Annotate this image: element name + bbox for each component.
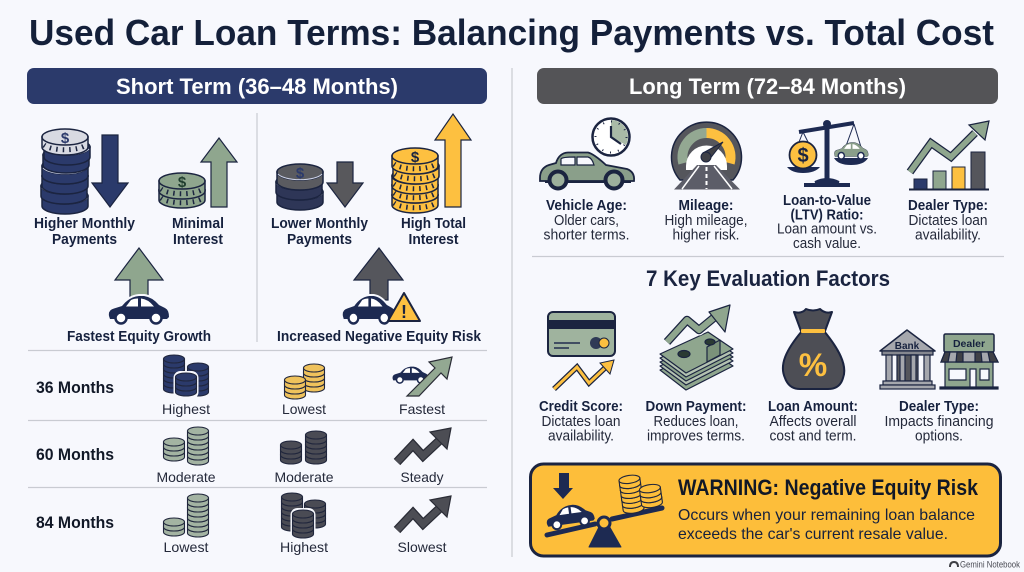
icon: money stack and arrow (660, 305, 733, 390)
label: down payment: Down Payment: (646, 399, 746, 415)
text: dealer type financing description (884, 414, 994, 444)
text: ltv description: cash value. (793, 236, 861, 252)
title: Used Car Loan Terms: Balancing Payments vs. Total Cost (29, 12, 994, 53)
icon: green coins and up arrow: $ (178, 174, 187, 191)
row: 36 months (36, 355, 452, 417)
row: 60 months (36, 427, 451, 485)
heading: long term (537, 68, 998, 104)
text: loan amount description: Affects overall (770, 414, 856, 430)
icon: bank and dealership: Bank (895, 341, 920, 352)
panel: short term vs long term comparison (27, 68, 487, 345)
heading: long term: Long Term (72–84 Months) (629, 74, 906, 99)
text: dealer type description: availability. (915, 228, 981, 244)
heading: 7 key evaluation factors: 7 Key Evaluation Factors (646, 266, 890, 291)
label: minimal interest: Minimal (172, 216, 224, 232)
icon: navy coins and down arrow: $ (61, 130, 70, 147)
label: loan-to-value ratio (783, 193, 871, 224)
heading: warning: WARNING: Negative Equity Risk (678, 475, 978, 500)
label: minimal interest: Interest (173, 232, 223, 248)
label: high total interest: High Total (401, 216, 466, 232)
label: lower monthly payments (271, 216, 368, 248)
panel: long term and key factors (530, 68, 1004, 556)
text: warning description: Occurs when your remaining loan balance (678, 507, 975, 524)
row: 60 months: Moderate (156, 469, 216, 485)
text: down payment description: Reduces loan, (654, 414, 738, 430)
text: dealer type financing description: options. (915, 428, 963, 444)
label: high total interest (401, 216, 466, 248)
text: down payment description (647, 414, 745, 444)
table: term comparison (36, 355, 452, 555)
label: vehicle age: Vehicle Age: (546, 198, 627, 214)
label: credit score: Credit Score: (539, 399, 623, 415)
text: credit score description: availability. (548, 428, 614, 444)
row: 84 months (36, 493, 451, 555)
label: dealer type: Dealer Type: (908, 198, 988, 214)
label: dealer type: Dealer Type: (899, 399, 979, 415)
text: mileage description: High mileage, (664, 213, 748, 229)
text: dealer type description: Dictates loan (908, 213, 988, 229)
row: 84 months: 84 Months (36, 514, 114, 532)
text: loan amount description (770, 414, 856, 444)
label: loan amount: Loan Amount: (768, 399, 858, 415)
label: mileage: Mileage: (678, 198, 734, 214)
label: loan-to-value ratio: Loan-to-Value (783, 193, 871, 209)
icon: dark coins and down arrow (276, 162, 363, 210)
text: dealer type financing description: Impacts financing (884, 414, 994, 430)
icon: balance scale with coin and car: $ (797, 145, 809, 167)
label: lower monthly payments: Payments (287, 232, 352, 248)
icon: money bag with percent (783, 309, 844, 389)
icon: money bag with percent: % (799, 347, 827, 383)
heading: short term (27, 68, 487, 104)
text: loan amount description: cost and term. (770, 428, 856, 444)
text: ltv description (777, 222, 877, 252)
text: credit score description: Dictates loan (542, 414, 620, 430)
text: warning description (678, 507, 975, 543)
text: warning description: exceeds the car's current resale value. (678, 526, 948, 543)
icon: car and clock (540, 118, 634, 188)
icon: bank and dealership: Dealer (953, 338, 985, 350)
text: ltv description: Loan amount vs. (777, 222, 877, 238)
row: 36 months: Highest (162, 401, 210, 417)
label: minimal interest (172, 216, 224, 248)
row: 60 months: 60 Months (36, 446, 114, 464)
label: lower monthly payments: Lower Monthly (271, 216, 368, 232)
label: higher monthly payments: Higher Monthly (34, 216, 135, 232)
row: 84 months: Highest (280, 539, 328, 555)
row: 84 months: Lowest (164, 539, 209, 555)
callout: negative equity warning (530, 464, 1000, 556)
row: 36 months: Fastest (399, 401, 445, 417)
text: vehicle age description (544, 213, 630, 244)
text: mileage description: higher risk. (672, 228, 740, 244)
text: down payment description: improves terms. (647, 428, 745, 444)
row: 36 months: 36 Months (36, 379, 114, 397)
icon: seesaw with car and coins (545, 471, 663, 547)
text: dealer type description (908, 213, 988, 244)
label: loan-to-value ratio: (LTV) Ratio: (790, 208, 864, 224)
label: fastest equity growth: Fastest Equity Growth (67, 329, 211, 345)
row: 60 months: Steady (400, 469, 444, 485)
icon: green coins and up arrow (159, 138, 237, 208)
icon: rising bars and arrow (909, 121, 989, 190)
icon: gold coins and tall up arrow (392, 114, 471, 213)
row: 60 months: Moderate (274, 469, 334, 485)
icon: gold coins and tall up arrow: $ (411, 149, 420, 166)
label: higher monthly payments (34, 216, 135, 248)
icon: credit card and trend (548, 312, 615, 389)
icon: green arrow and car (109, 248, 169, 324)
icon: balance scale with coin and car (787, 120, 868, 186)
row: 84 months: Slowest (398, 539, 447, 555)
icon: dark arrow, car and warning triangle (343, 248, 420, 324)
icon: bank and dealership (880, 330, 998, 389)
icon: dark coins and down arrow: $ (296, 165, 305, 182)
icon: navy coins and down arrow (41, 129, 128, 214)
text: vehicle age description: shorter terms. (544, 228, 630, 244)
text: vehicle age description: Older cars, (554, 213, 619, 229)
label: increased negative equity risk: Increased Negative Equity Risk (277, 329, 482, 345)
text: credit score description (542, 414, 620, 444)
label: high total interest: Interest (408, 232, 459, 248)
label: higher monthly payments: Payments (52, 232, 117, 248)
text: mileage description (664, 213, 748, 244)
icon: dark arrow, car and warning triangle: ! (401, 302, 407, 322)
row: 36 months: Lowest (282, 401, 326, 417)
heading: short term: Short Term (36–48 Months) (116, 74, 398, 99)
icon: mileage gauge on road (672, 122, 742, 190)
